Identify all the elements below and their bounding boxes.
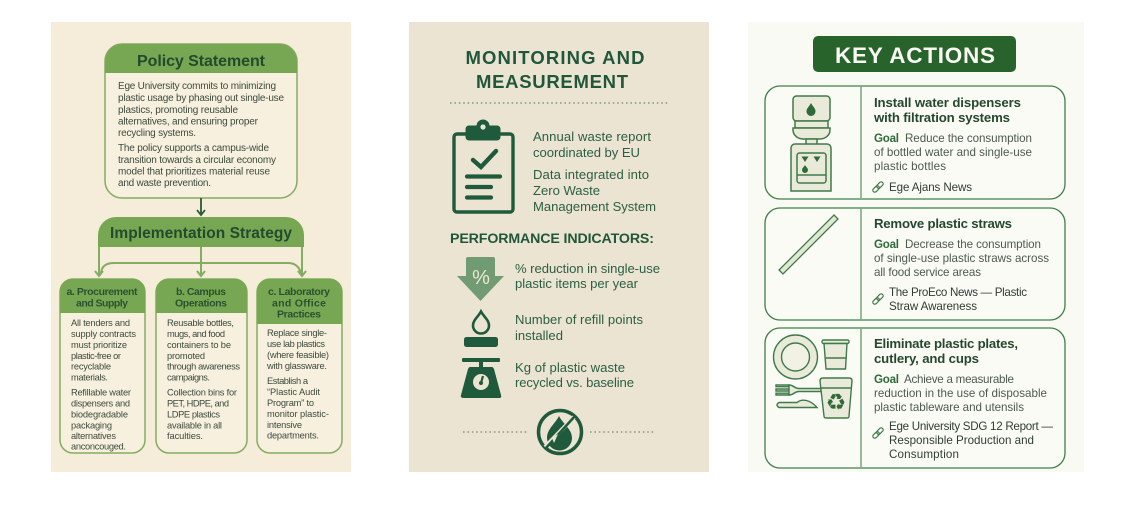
card: plastic straws <box>765 208 1065 320</box>
card: procurement and supply: packaging <box>71 420 112 430</box>
card: campus operations: available in all <box>167 420 222 430</box>
card: campus operations: Collection bins for <box>167 388 237 398</box>
icon: weighing scale <box>461 358 501 398</box>
text: water dispenser goal <box>874 132 1032 173</box>
card: campus operations: faculties. <box>167 431 203 441</box>
text: link proeco news: The ProEco News — Plastic <box>889 286 1027 299</box>
card: laboratory and office practices: (where feasible) <box>267 350 329 360</box>
text: monitoring items: Annual waste report <box>533 129 651 144</box>
card: laboratory and office practices: use lab plastics <box>267 339 325 349</box>
card: plastic tableware <box>765 328 1065 468</box>
heading: install water dispensers <box>873 95 1021 125</box>
text: tableware goal: plastic tableware and utensils <box>874 401 1024 414</box>
text: straws goal: all food service areas <box>874 266 981 279</box>
icon: tableware <box>774 335 852 418</box>
text: monitoring items: Management System <box>533 199 656 214</box>
arrows: strategy branches <box>95 247 306 276</box>
text: refill points: installed <box>515 328 563 343</box>
text: tableware goal: Achieve a measurable <box>904 373 1014 386</box>
text: tableware goal: Goal <box>874 373 899 386</box>
icon: no plastic drop <box>538 410 582 454</box>
card: laboratory and office practices: monitor plastic- <box>267 409 329 419</box>
text: policy statement body: alternatives, and ensuring proper <box>118 116 259 128</box>
text: percent reduction: plastic items per year <box>515 276 639 291</box>
text: refill points: Number of refill points <box>515 312 643 327</box>
heading: install water dispensers: Install water dispensers <box>874 95 1021 110</box>
text: policy statement body <box>118 81 284 189</box>
heading: remove plastic straws: Remove plastic straws <box>874 216 1012 231</box>
text: policy statement body: and waste prevention. <box>118 178 211 189</box>
text: policy statement body: model that prioritizes material reuse <box>118 166 270 178</box>
card: campus operations: containers to be <box>167 340 231 350</box>
card: campus operations: b. Campus <box>176 286 226 298</box>
text: plastic recycled: Kg of plastic waste <box>515 360 625 375</box>
text: water dispenser goal: Goal <box>874 132 899 145</box>
icon: clipboard checklist <box>454 120 513 212</box>
card: laboratory and office practices: Replace single- <box>267 328 327 338</box>
text: water dispenser goal: of bottled water and single-use <box>874 146 1032 159</box>
card: procurement and supply: anconcouged. <box>71 442 126 452</box>
card: procurement and supply: plastic-free or <box>71 351 121 361</box>
text: link sdg 12 report: Consumption <box>889 448 959 461</box>
text: link sdg 12 report: Responsible Production and <box>889 434 1034 447</box>
card: procurement and supply: and Supply <box>76 298 128 310</box>
icon: recycling symbol: ♻ <box>826 390 846 416</box>
card: campus operations: LDPE plastics <box>167 410 220 420</box>
card: procurement and supply <box>60 279 145 453</box>
card: laboratory and office practices: “Plastic Audit <box>267 387 320 397</box>
text: plastic recycled: recycled vs. baseline <box>515 375 634 390</box>
text: link proeco news: Straw Awareness <box>889 300 977 313</box>
card: procurement and supply: alternatives <box>71 431 116 441</box>
text: link ege ajans news: Ege Ajans News <box>889 181 972 194</box>
text: policy statement body: plastic usage by phasing out single-use <box>118 93 284 104</box>
card: laboratory and office practices: intensive <box>267 420 302 430</box>
card: procurement and supply: materials. <box>71 372 108 382</box>
text: monitoring items <box>533 129 656 214</box>
heading: monitoring and measurement: MEASUREMENT <box>476 71 629 92</box>
text: monitoring items: Zero Waste <box>533 183 600 198</box>
card: procurement and supply: a. Procurement <box>66 286 138 298</box>
heading: monitoring and measurement <box>466 47 644 92</box>
text: refill points <box>515 312 643 343</box>
heading: performance indicators: PERFORMANCE INDICATORS: <box>450 231 654 247</box>
text: policy statement body: The policy supports a campus-wide <box>118 143 269 154</box>
heading: key actions: KEY ACTIONS <box>835 43 995 68</box>
text: plastic recycled <box>515 360 634 390</box>
text: straws goal <box>874 238 1049 279</box>
panel: key actions <box>748 22 1084 472</box>
icon: link <box>872 181 884 193</box>
text: percent reduction <box>515 261 660 291</box>
text: policy statement body: Ege University commits to minimizing <box>118 81 276 92</box>
text: percent reduction: % reduction in single-use <box>515 261 660 276</box>
panel: implementation strategy header <box>98 217 304 247</box>
heading: key actions <box>813 36 1016 72</box>
heading: eliminate plastic plates <box>874 336 1018 366</box>
panel: monitoring and measurement <box>409 22 709 472</box>
card: laboratory and office practices: Program” to <box>267 398 314 408</box>
card: laboratory and office practices: departments. <box>267 430 319 440</box>
text: policy statement body: recycling systems. <box>118 128 196 139</box>
icon: percent down arrow: % <box>472 267 490 289</box>
panel: policy and implementation <box>51 22 351 472</box>
icon: water dispenser <box>791 96 831 191</box>
text: straws goal: Decrease the consumption <box>905 238 1041 251</box>
heading: eliminate plastic plates: cutlery, and cups <box>874 351 979 366</box>
card: procurement and supply: supply contracts <box>71 329 136 339</box>
text: policy statement body: transition towards a circular economy <box>118 155 276 166</box>
text: link sdg 12 report <box>889 420 1053 461</box>
card: laboratory and office practices: c. Laboratory <box>268 286 330 298</box>
panel: policy statement <box>105 44 297 198</box>
icon: link <box>872 293 884 305</box>
arrow: policy to implementation <box>197 198 205 215</box>
card: procurement and supply: recyclable <box>71 362 111 372</box>
text: tableware goal <box>874 373 1047 414</box>
heading: install water dispensers: with filtration systems <box>873 110 1010 125</box>
text: water dispenser goal: Reduce the consumption <box>905 132 1032 145</box>
icon: straw <box>779 215 838 274</box>
text: water dispenser goal: plastic bottles <box>874 160 946 173</box>
panel: implementation strategy header: Implementation Strategy <box>110 225 292 242</box>
card: campus operations: Reusable bottles, <box>167 318 234 328</box>
card: campus operations: PET, HDPE, and <box>167 398 229 408</box>
text: straws goal: Goal <box>874 238 899 251</box>
card: procurement and supply: must prioritize <box>71 340 127 350</box>
icon: refill drop <box>464 312 498 347</box>
heading: eliminate plastic plates: Eliminate plastic plates, <box>874 336 1018 351</box>
card: campus operations: promoted <box>167 351 205 361</box>
card: campus operations: through awareness <box>167 362 240 372</box>
card: laboratory and office practices: Practices <box>277 308 321 320</box>
card: laboratory and office practices <box>257 279 342 453</box>
card: laboratory and office practices: with glassware. <box>266 361 327 371</box>
text: tableware goal: reduction in the use of disposable <box>874 387 1047 400</box>
text: link proeco news <box>889 286 1027 313</box>
heading: policy statement: Policy Statement <box>137 53 266 70</box>
card: procurement and supply: dispensers and <box>71 398 130 408</box>
card: procurement and supply: biodegradable <box>71 410 128 420</box>
card: water dispensers <box>765 86 1065 199</box>
card: campus operations: Operations <box>175 298 227 310</box>
card: campus operations: mugs, and food <box>167 329 225 339</box>
card: procurement and supply: All tenders and <box>71 318 130 328</box>
heading: monitoring and measurement: MONITORING AND <box>466 47 644 68</box>
text: straws goal: of single-use plastic straws across <box>874 252 1049 265</box>
text: monitoring items: Data integrated into <box>533 167 649 182</box>
card: campus operations <box>156 279 247 453</box>
text: policy statement body: plastics, promoting reusable <box>118 105 238 116</box>
card: procurement and supply: Refillable water <box>71 388 131 398</box>
text: monitoring items: coordinated by EU <box>533 145 640 160</box>
card: laboratory and office practices: Establish a <box>267 376 309 386</box>
icon: percent down arrow <box>457 257 504 301</box>
text: link sdg 12 report: Ege University SDG 12 Report — <box>889 420 1053 433</box>
icon: link <box>872 427 884 439</box>
card: laboratory and office practices: and Office <box>272 298 326 310</box>
card: campus operations: campaigns. <box>167 372 210 382</box>
